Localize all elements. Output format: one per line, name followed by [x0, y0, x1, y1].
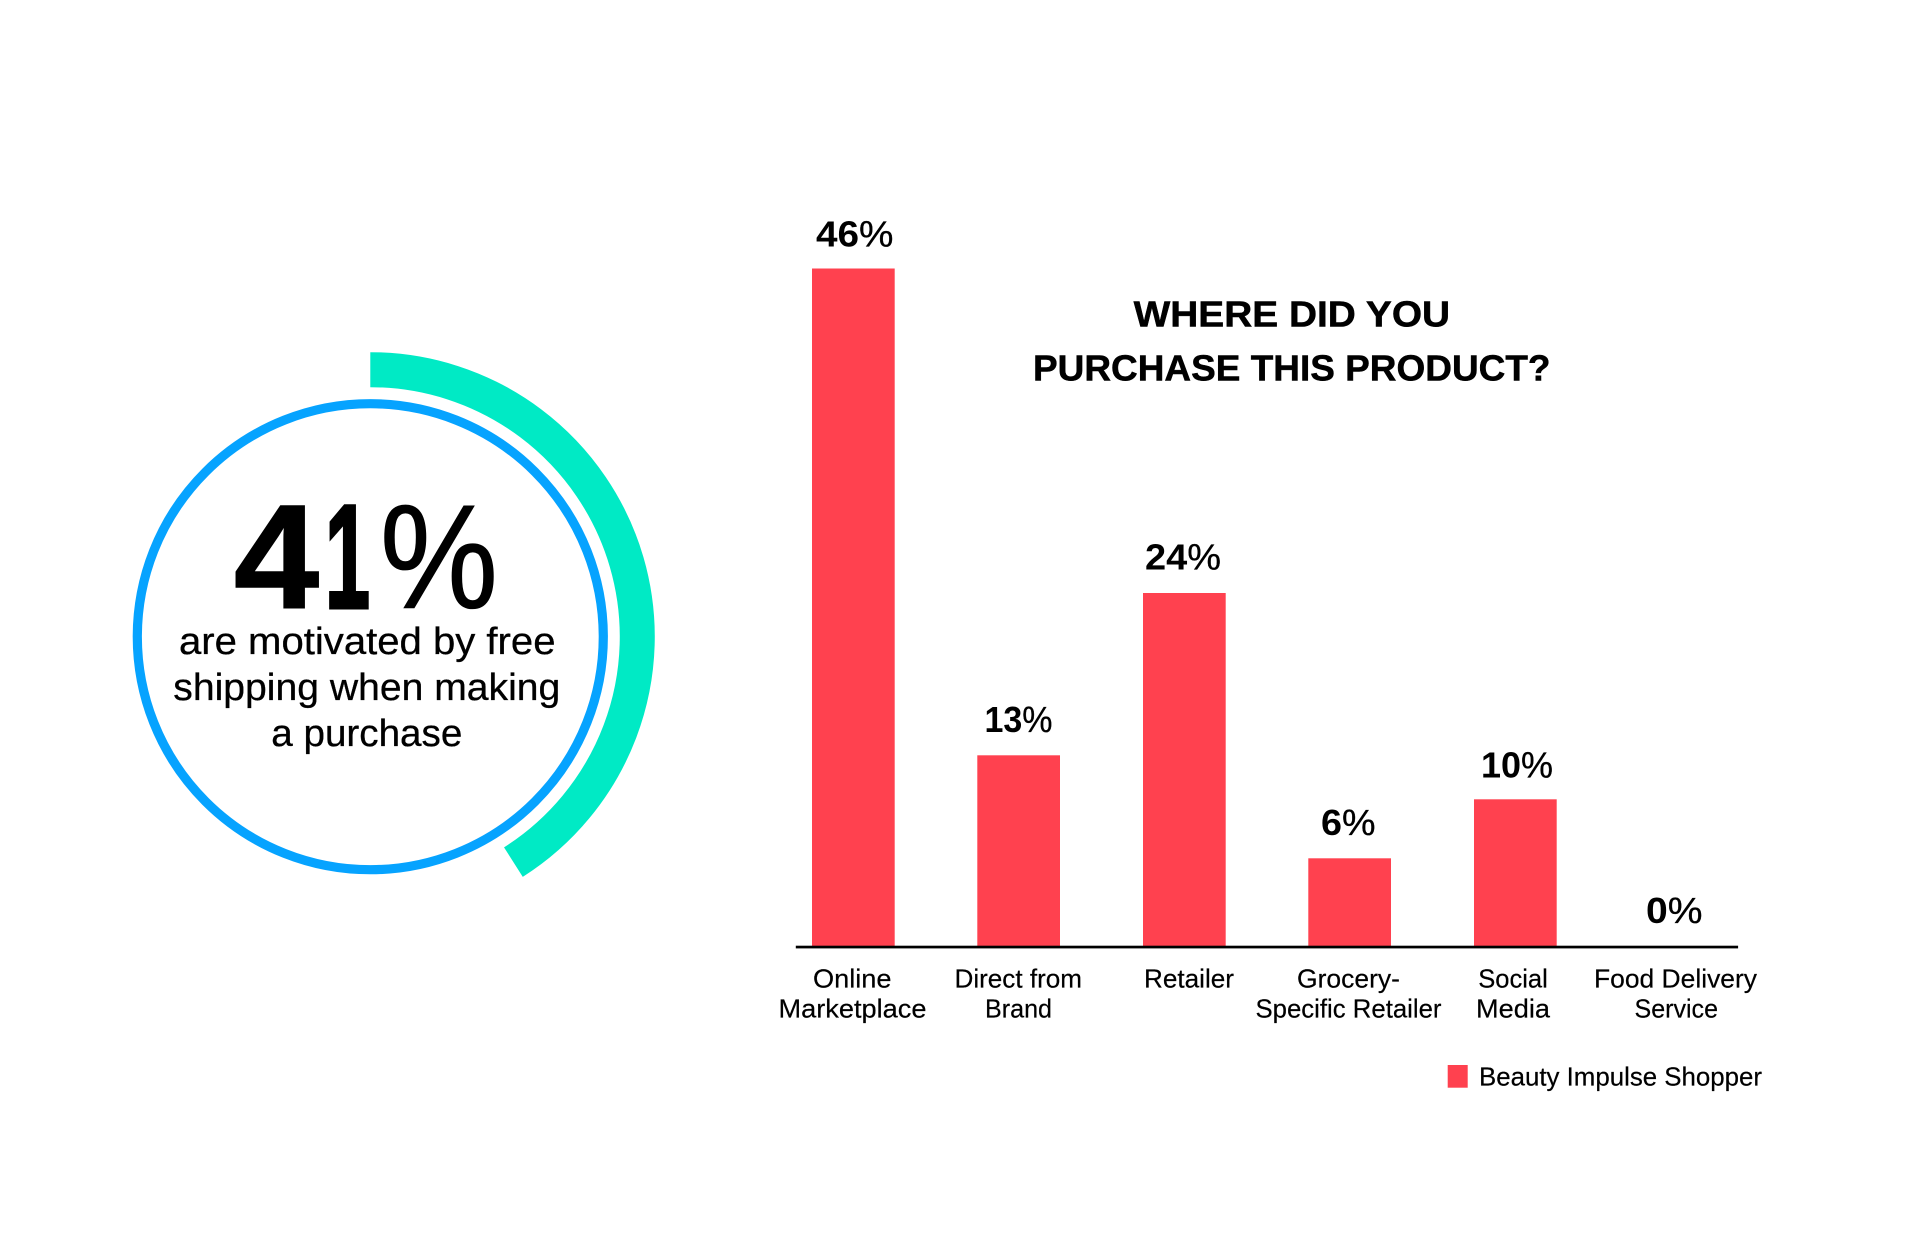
- category labels: Online: [813, 963, 892, 993]
- category labels: Brand: [985, 994, 1052, 1024]
- chart title: [1033, 294, 1550, 388]
- axis line: [796, 946, 1738, 948]
- stat description: [173, 621, 560, 755]
- category labels: Food Delivery: [1594, 963, 1757, 993]
- value labels: 13%: [984, 699, 1052, 740]
- legend: Beauty Impulse Shopper: [1479, 1062, 1762, 1092]
- value labels: 10%: [1481, 745, 1553, 786]
- category labels: Service: [1634, 994, 1718, 1024]
- value labels: 0%: [1646, 890, 1702, 931]
- bars: [812, 268, 1557, 946]
- value labels: [816, 214, 1702, 931]
- bar chart: [778, 214, 1757, 1023]
- category labels: Marketplace: [778, 994, 926, 1024]
- value labels: 24%: [1145, 536, 1221, 577]
- stat description: a purchase: [271, 713, 462, 755]
- category labels: Social: [1478, 963, 1548, 993]
- category labels: Direct from: [954, 963, 1082, 993]
- chart title: WHERE DID YOU: [1134, 294, 1450, 335]
- category labels: Media: [1476, 994, 1551, 1024]
- green progress arc: [370, 370, 637, 862]
- value labels: 46%: [816, 214, 894, 255]
- category labels: [778, 963, 1757, 1024]
- category labels: Retailer: [1144, 963, 1234, 993]
- stat description: shipping when making: [173, 667, 560, 709]
- panel: free shipping stat: [137, 370, 637, 870]
- big number: 41%: 1: [325, 475, 370, 640]
- blue circle: [137, 404, 603, 870]
- stat description: are motivated by free: [179, 621, 556, 663]
- chart title: PURCHASE THIS PRODUCT?: [1033, 347, 1550, 388]
- big number: 41%: 4: [234, 475, 319, 640]
- category labels: Grocery-: [1297, 963, 1400, 993]
- big number: 41%: %: [380, 475, 498, 640]
- category labels: Specific Retailer: [1256, 994, 1442, 1024]
- value labels: 6%: [1321, 802, 1376, 843]
